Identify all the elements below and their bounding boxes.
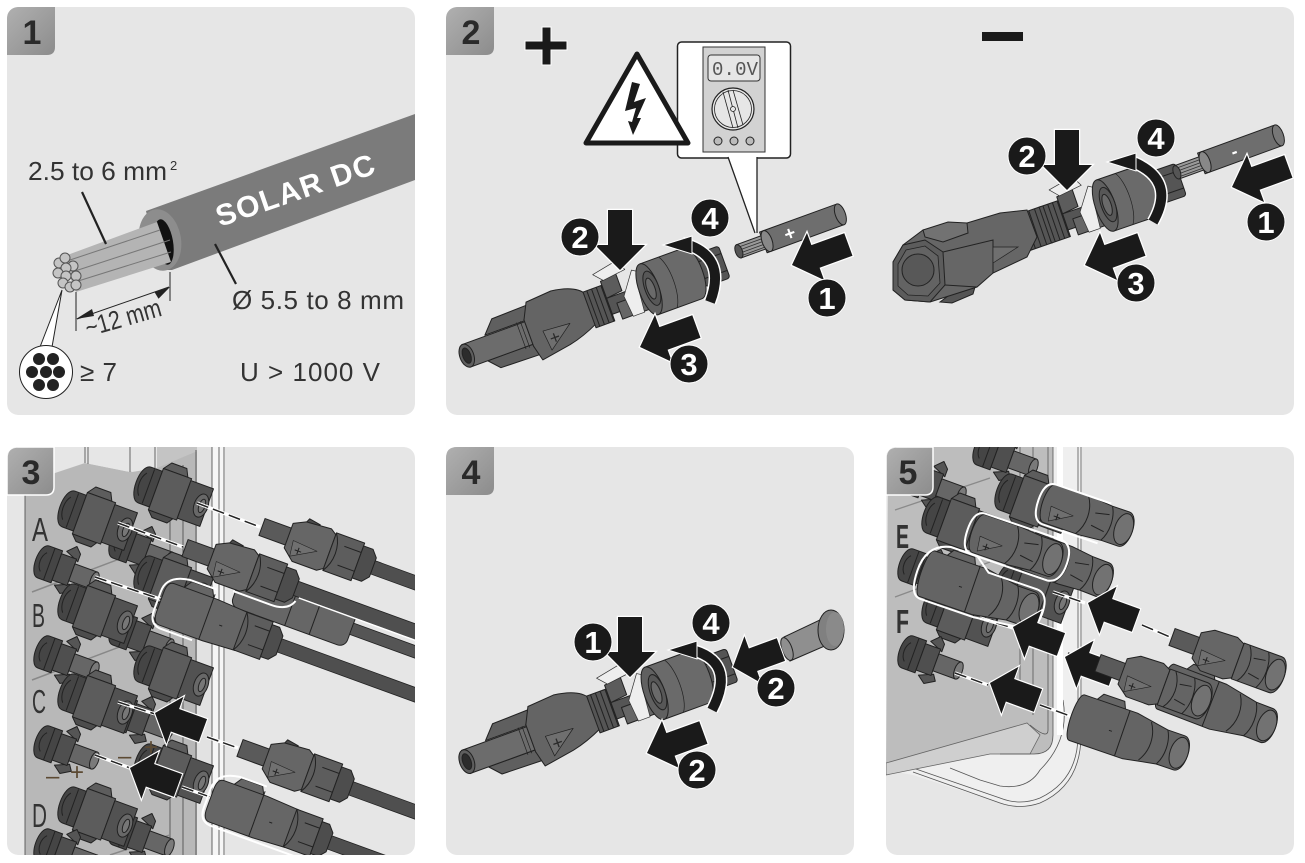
step numbers bbox=[574, 604, 795, 789]
inverter sockets bbox=[892, 422, 1079, 694]
multimeter callout showing 0.0 V bbox=[678, 42, 790, 233]
connector plus with cable, highlighted bbox=[182, 539, 415, 641]
panel 1: cable specification bbox=[7, 7, 415, 415]
free connector minus, lower bbox=[1063, 686, 1198, 778]
step badge 5: 5 bbox=[899, 454, 917, 492]
free connector plus, right: + bbox=[1200, 651, 1213, 669]
panel 5: plug connectors into inverter E and F bbox=[886, 422, 1294, 855]
label: conductor cross-section bbox=[29, 161, 177, 180]
negative stripped cable bbox=[1172, 124, 1285, 180]
string letters bbox=[896, 518, 909, 640]
positive stripped cable bbox=[734, 203, 847, 258]
step numbers: 2 bbox=[767, 671, 785, 706]
connector minus with cable, highlighted bbox=[151, 578, 415, 703]
minus side arrows bbox=[1042, 130, 1297, 288]
label: voltage rating: U > 1000 V bbox=[240, 357, 381, 387]
inverter enclosure frame bbox=[886, 447, 1082, 806]
plus side step numbers: 4 bbox=[701, 201, 719, 236]
label: conductor cross-section: 2 bbox=[170, 158, 177, 173]
panel 4: seal unused connector bbox=[446, 447, 854, 855]
connector with sealing plug path: + bbox=[549, 731, 566, 754]
polarity labels: – bbox=[118, 743, 132, 770]
multimeter callout showing 0.0 V: 0.0V bbox=[712, 59, 759, 81]
positive stripped cable: + bbox=[781, 222, 799, 246]
sealed connector minus, highlighted: - bbox=[956, 578, 965, 594]
string letters: C bbox=[32, 683, 46, 720]
plus side arrows bbox=[595, 210, 857, 370]
label: cable diameter: Ø 5.5 to 8 mm bbox=[232, 285, 404, 315]
connector plus with cable, upper: + bbox=[291, 542, 305, 560]
step badge 4 bbox=[446, 447, 494, 495]
label: conductor cross-section: 2.5 to 6 mm bbox=[28, 156, 167, 186]
free connector plus, middle: + bbox=[1126, 677, 1139, 695]
positive connector, disassembled bbox=[458, 246, 730, 368]
dashed insertion guides bbox=[955, 592, 1170, 717]
minus side step numbers: 4 bbox=[1147, 121, 1165, 156]
string letters: B bbox=[32, 597, 45, 634]
sealed connector plus, top: + bbox=[1051, 508, 1064, 526]
stripped wire strands bbox=[53, 222, 171, 292]
right column inverter sockets bbox=[108, 462, 214, 855]
sealing plug bbox=[778, 610, 844, 662]
free connector plus, right bbox=[1164, 616, 1291, 698]
polarity labels: + bbox=[144, 734, 158, 761]
connector plus with cable, highlighted: + bbox=[214, 563, 228, 581]
background cable connector bbox=[232, 590, 415, 659]
minus polarity symbol bbox=[982, 32, 1023, 41]
free connector minus, lower: - bbox=[1106, 722, 1115, 738]
inverter wall bbox=[25, 447, 225, 855]
step badge 5 bbox=[886, 447, 933, 495]
string letters: D bbox=[32, 797, 47, 834]
left column inverter sockets bbox=[33, 486, 138, 855]
dashed insertion guides bbox=[95, 503, 260, 798]
step badge 1: 1 bbox=[23, 14, 41, 52]
cable with SOLAR DC marking: SOLAR DC bbox=[212, 148, 379, 234]
connector minus with cable, lower: - bbox=[266, 814, 276, 829]
step numbers: 1 bbox=[584, 625, 602, 660]
dimension line 12 mm bbox=[76, 272, 171, 331]
step numbers: 4 bbox=[702, 606, 720, 641]
negative stripped cable: - bbox=[1228, 141, 1240, 162]
negative connector, disassembled bbox=[892, 164, 1186, 304]
plus side step numbers: 3 bbox=[680, 347, 698, 382]
polarity labels: – bbox=[46, 763, 60, 790]
label: strip length: ~12 mm bbox=[81, 292, 165, 343]
cross-section magnifier with strand count bbox=[20, 290, 72, 398]
sealed connector behind, right bbox=[1016, 530, 1118, 602]
string letters: E bbox=[896, 518, 909, 555]
step badge 3 bbox=[7, 447, 54, 495]
sealed connector plus, highlighted: + bbox=[980, 538, 993, 556]
minus side step numbers: 3 bbox=[1127, 266, 1145, 301]
leader lines bbox=[82, 192, 236, 284]
step badge 2: 2 bbox=[462, 14, 480, 52]
plus polarity symbol bbox=[525, 27, 567, 65]
positive connector, disassembled: + bbox=[546, 326, 563, 349]
plus side step numbers bbox=[561, 199, 846, 383]
polarity labels bbox=[46, 741, 157, 778]
minus side step numbers bbox=[1008, 119, 1285, 302]
connector plus with cable, upper bbox=[258, 518, 415, 590]
sealed connector plus, top bbox=[1031, 481, 1139, 553]
cable with SOLAR DC marking bbox=[134, 114, 415, 274]
step numbers: 2 bbox=[688, 753, 706, 788]
step badge 2 bbox=[446, 7, 494, 55]
connector minus with cable, lower bbox=[202, 774, 386, 855]
string letters: F bbox=[896, 603, 909, 640]
sealed connector minus, highlighted bbox=[909, 539, 1053, 638]
plus side step numbers: 2 bbox=[571, 220, 589, 255]
minus side step numbers: 1 bbox=[1257, 205, 1275, 240]
minus side step numbers: 2 bbox=[1018, 139, 1036, 174]
string letters bbox=[32, 511, 48, 834]
polarity labels: + bbox=[70, 759, 84, 786]
step badge 4: 4 bbox=[462, 454, 481, 492]
free connector behind, lower right bbox=[1152, 656, 1286, 751]
arrows bbox=[981, 580, 1144, 724]
step badge 3: 3 bbox=[22, 454, 40, 492]
connector plus with cable, lower bbox=[236, 739, 415, 820]
sealed connector plus, highlighted bbox=[960, 510, 1074, 585]
insertion arrows bbox=[128, 694, 208, 802]
connector minus with cable, highlighted: - bbox=[216, 617, 226, 632]
step badge 1 bbox=[7, 7, 55, 55]
free connector plus, middle bbox=[1090, 642, 1217, 724]
electric hazard warning triangle bbox=[586, 54, 688, 143]
label: minimum strand count: ≥ 7 bbox=[80, 357, 117, 387]
panel 3: plug connectors into inverter A to D bbox=[7, 447, 415, 855]
panel 2: assemble positive and negative connectors bbox=[446, 7, 1297, 415]
connector with sealing plug path bbox=[447, 628, 743, 793]
arrows bbox=[605, 617, 789, 776]
string letters: A bbox=[32, 511, 48, 548]
connector plus with cable, lower: + bbox=[269, 763, 283, 781]
plus side step numbers: 1 bbox=[818, 281, 836, 316]
